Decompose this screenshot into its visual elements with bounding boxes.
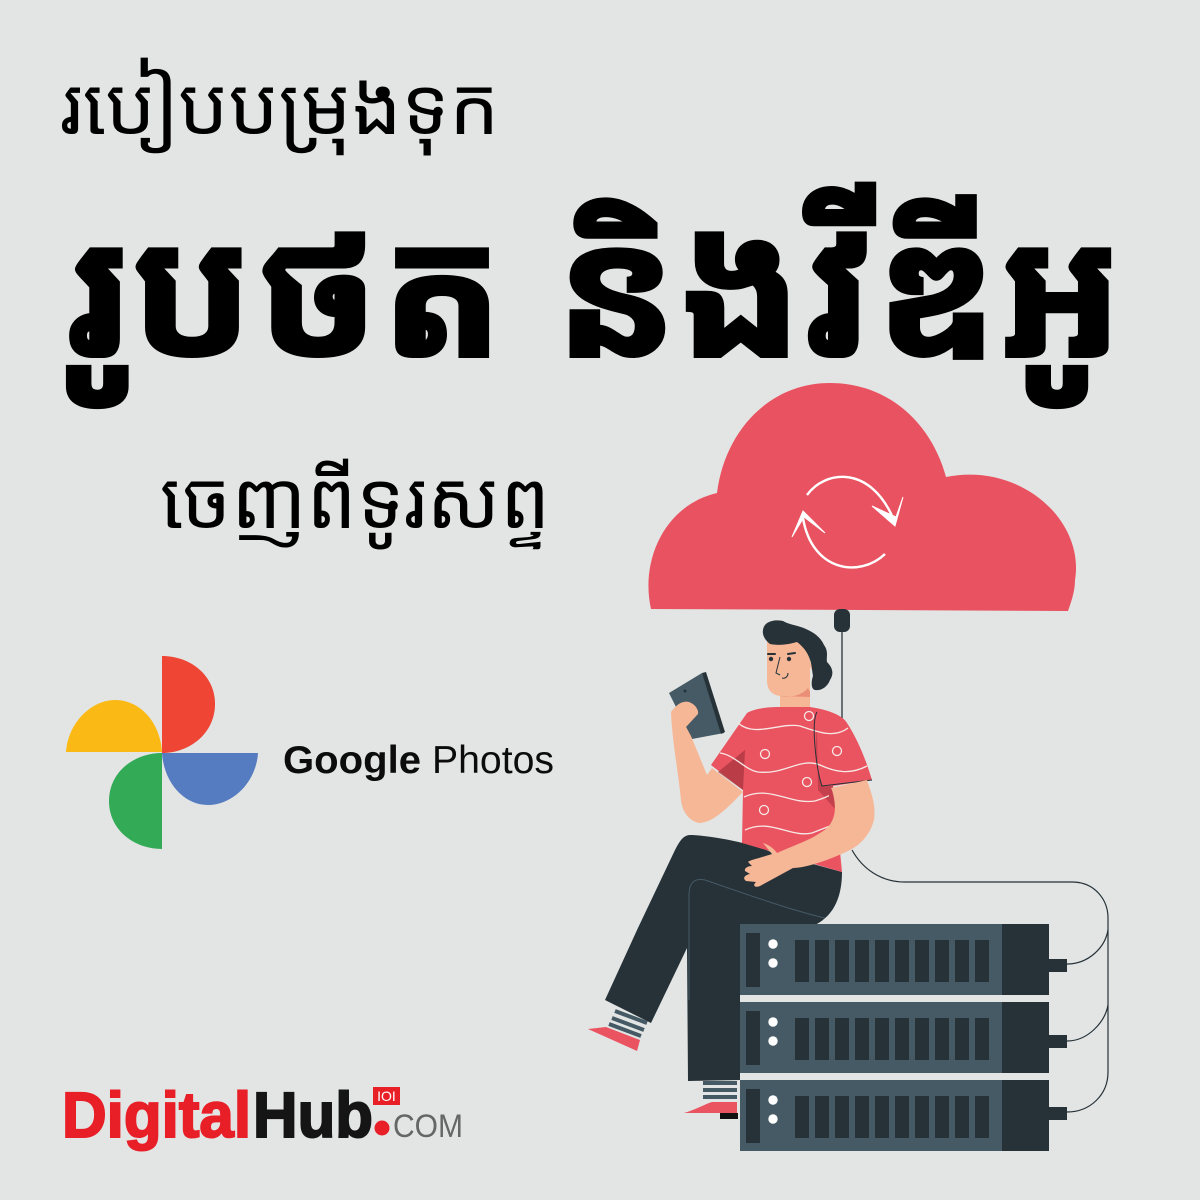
heading: main title: រូបថត និងវីឌីអូ	[64, 183, 1123, 408]
back lower leg socks and shoe	[588, 1009, 649, 1051]
logo text: Google Photos	[283, 739, 554, 782]
server stack	[740, 924, 1067, 1151]
logo: DigitalHub.com	[62, 1079, 463, 1151]
logo: DigitalHub.com: Hub	[253, 1079, 373, 1151]
logo text: Google Photos: Google	[283, 739, 421, 782]
icon: cloud with sync arrows	[648, 383, 1076, 611]
head	[763, 620, 832, 697]
raised arm and hand	[671, 702, 743, 823]
server 1	[740, 924, 1067, 995]
cables	[842, 628, 1108, 1112]
neck	[780, 680, 810, 712]
illustration: person sitting on servers	[588, 620, 875, 1119]
shirt pattern	[720, 712, 872, 834]
shirt	[711, 707, 872, 872]
resting arm and hand	[744, 780, 875, 887]
logo: DigitalHub.com: COM	[393, 1108, 463, 1144]
plug	[834, 609, 850, 632]
logo: DigitalHub.com: IOI	[377, 1088, 396, 1104]
phone	[669, 672, 725, 739]
icon: Google Photos pinwheel	[66, 656, 258, 849]
trousers	[605, 835, 842, 1081]
server 2	[740, 1002, 1067, 1073]
server 3	[740, 1080, 1067, 1151]
logo text: Google Photos: Photos	[432, 739, 554, 782]
front sock and shoe	[684, 1083, 738, 1119]
logo: DigitalHub.com: Digital	[62, 1079, 251, 1151]
heading: top line: របៀបបម្រុងទុក	[60, 57, 499, 156]
heading: third line: ចេញពីទូរសព្ទ	[160, 456, 550, 550]
